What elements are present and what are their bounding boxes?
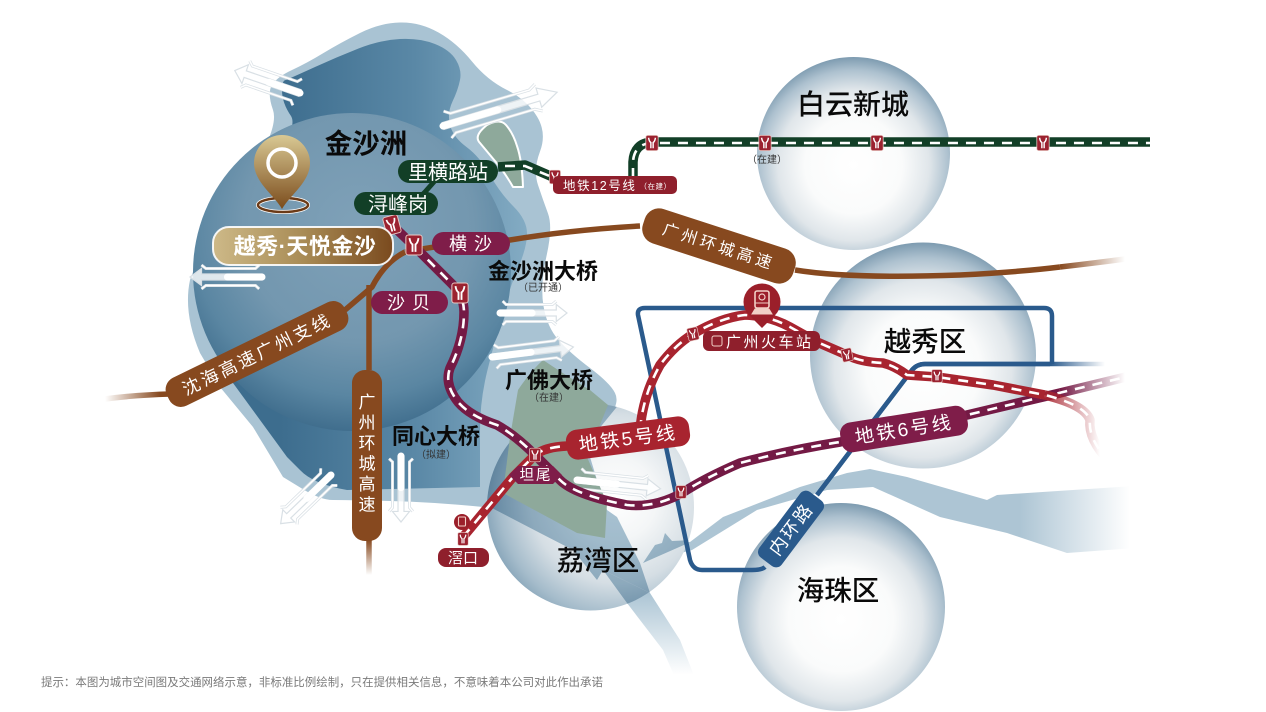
project label	[213, 227, 393, 265]
footnote: 提示：本图为城市空间图及交通网络示意，非标准比例绘制，只在提供相关信息，不意味着本公司对此作出承诺	[41, 675, 603, 689]
water: south river branch	[603, 570, 700, 712]
label: Hengsha station	[432, 232, 510, 255]
district name: Liwan: 荔湾区	[557, 545, 639, 576]
green island: small	[478, 122, 523, 187]
label: Hengsha station: 横 沙	[449, 234, 493, 254]
icon: Guangzhou railway station	[744, 284, 780, 328]
metro line 12	[412, 142, 1150, 205]
bridge arrow: top middle	[439, 79, 561, 139]
water: Pearl River east branch	[643, 469, 1150, 563]
district circle: Baiyun New Town	[757, 57, 950, 250]
label: Tanwei station: 坦尾	[520, 467, 552, 484]
label: Guangzhou ring expressway vertical: 高	[358, 475, 376, 494]
bridge arrow: Jinshazhou bridge	[500, 301, 567, 325]
road: Guangzhou ring expressway and branch	[105, 226, 1125, 575]
label: metro line 12	[553, 176, 677, 194]
metro line 5	[463, 315, 1110, 537]
district name: Baiyun New Town: 白云新城	[797, 89, 909, 120]
label: metro line 6	[838, 404, 970, 454]
district circle: Jinshazhou	[193, 113, 511, 431]
bridge name: Tongxin bridge: （拟建）	[416, 448, 456, 461]
label: Shabei station: 沙 贝	[387, 293, 431, 313]
label: Shenhai expressway Guangzhou branch	[161, 297, 353, 411]
bridge name: Jinshazhou bridge: 金沙洲大桥	[488, 259, 598, 284]
bridge arrow: lower left	[272, 466, 339, 532]
label: Guangzhou ring expressway vertical: 环	[358, 434, 376, 453]
label: Tanwei station	[509, 466, 562, 484]
project label: 越秀·天悦金沙	[234, 234, 376, 259]
label: metro line 12: 地铁12号线	[563, 179, 637, 193]
label: Xiaokou station	[438, 548, 489, 567]
label: Guangzhou ring expressway horizontal: 广州环城高速	[660, 220, 777, 274]
district name: Yuexiu: 越秀区	[884, 326, 966, 357]
district circle: Haizhu	[737, 503, 945, 711]
label: Guangzhou ring expressway horizontal	[638, 204, 800, 288]
label: Liheng Road station: 里横路站	[408, 161, 488, 184]
green island: large	[503, 360, 608, 538]
label: Guangzhou ring expressway vertical: 广	[358, 393, 376, 412]
label: (under construction) on line 12: （在建）	[747, 153, 787, 166]
label: Guangzhou ring expressway vertical: 速	[358, 496, 376, 514]
label: Shabei station	[371, 291, 448, 314]
bridge arrow: Liwan	[576, 468, 662, 501]
road: inner ring	[638, 308, 1105, 570]
label: Xiaokou station: 滘口	[448, 550, 478, 567]
label: Guangzhou ring expressway vertical: 州	[358, 414, 376, 432]
district name: Haizhu: 海珠区	[797, 575, 879, 606]
bridge arrow: top left	[230, 57, 305, 106]
district circle: Yuexiu	[810, 242, 1036, 468]
label: inner ring road: 内环路	[765, 499, 817, 559]
label: metro line 6: 地铁6号线	[854, 411, 955, 449]
stations	[382, 135, 1049, 545]
label: Guangzhou ring expressway vertical	[352, 370, 382, 541]
bridge name: Guangfo bridge: 广佛大桥	[505, 368, 593, 393]
label: Guangzhou railway station: 广州火车站	[726, 334, 814, 351]
bridge arrow: left	[190, 265, 262, 289]
label: Guangzhou ring expressway vertical: 城	[358, 454, 376, 474]
icon: Xiaokou depot train	[454, 514, 470, 530]
label: metro line 12: （在建）	[640, 181, 672, 191]
bridge name: Jinshazhou bridge: （已开通）	[518, 282, 568, 294]
location pin	[254, 135, 310, 212]
water: Jinshazhou river light band	[188, 22, 650, 593]
bridge name: Tongxin bridge	[392, 424, 480, 461]
label: Shenhai expressway Guangzhou branch: 沈海高速广州支线	[179, 310, 335, 399]
place name: Jinshazhou: 金沙洲	[325, 128, 407, 159]
metro line 6	[392, 225, 1130, 506]
district circle: Liwan	[487, 404, 694, 610]
bridge name: Tongxin bridge: 同心大桥	[392, 424, 480, 449]
label: metro line 5: 地铁5号线	[578, 422, 679, 456]
label: Guangzhou railway station	[703, 331, 820, 351]
bridge name: Guangfo bridge: （在建）	[529, 391, 569, 404]
bridge name: Guangfo bridge	[505, 368, 593, 404]
bridge arrow: Tongxin bridge	[389, 456, 413, 522]
water: deep channel	[204, 39, 527, 490]
label: inner ring road	[755, 488, 827, 570]
bridge arrow: Guangfo bridge	[491, 335, 575, 369]
label: Xunfenggang station: 浔峰岗	[368, 193, 428, 216]
water seen through Liwan circle	[487, 404, 688, 604]
label: metro line 5	[565, 415, 691, 461]
label: Xunfenggang station	[354, 192, 438, 216]
